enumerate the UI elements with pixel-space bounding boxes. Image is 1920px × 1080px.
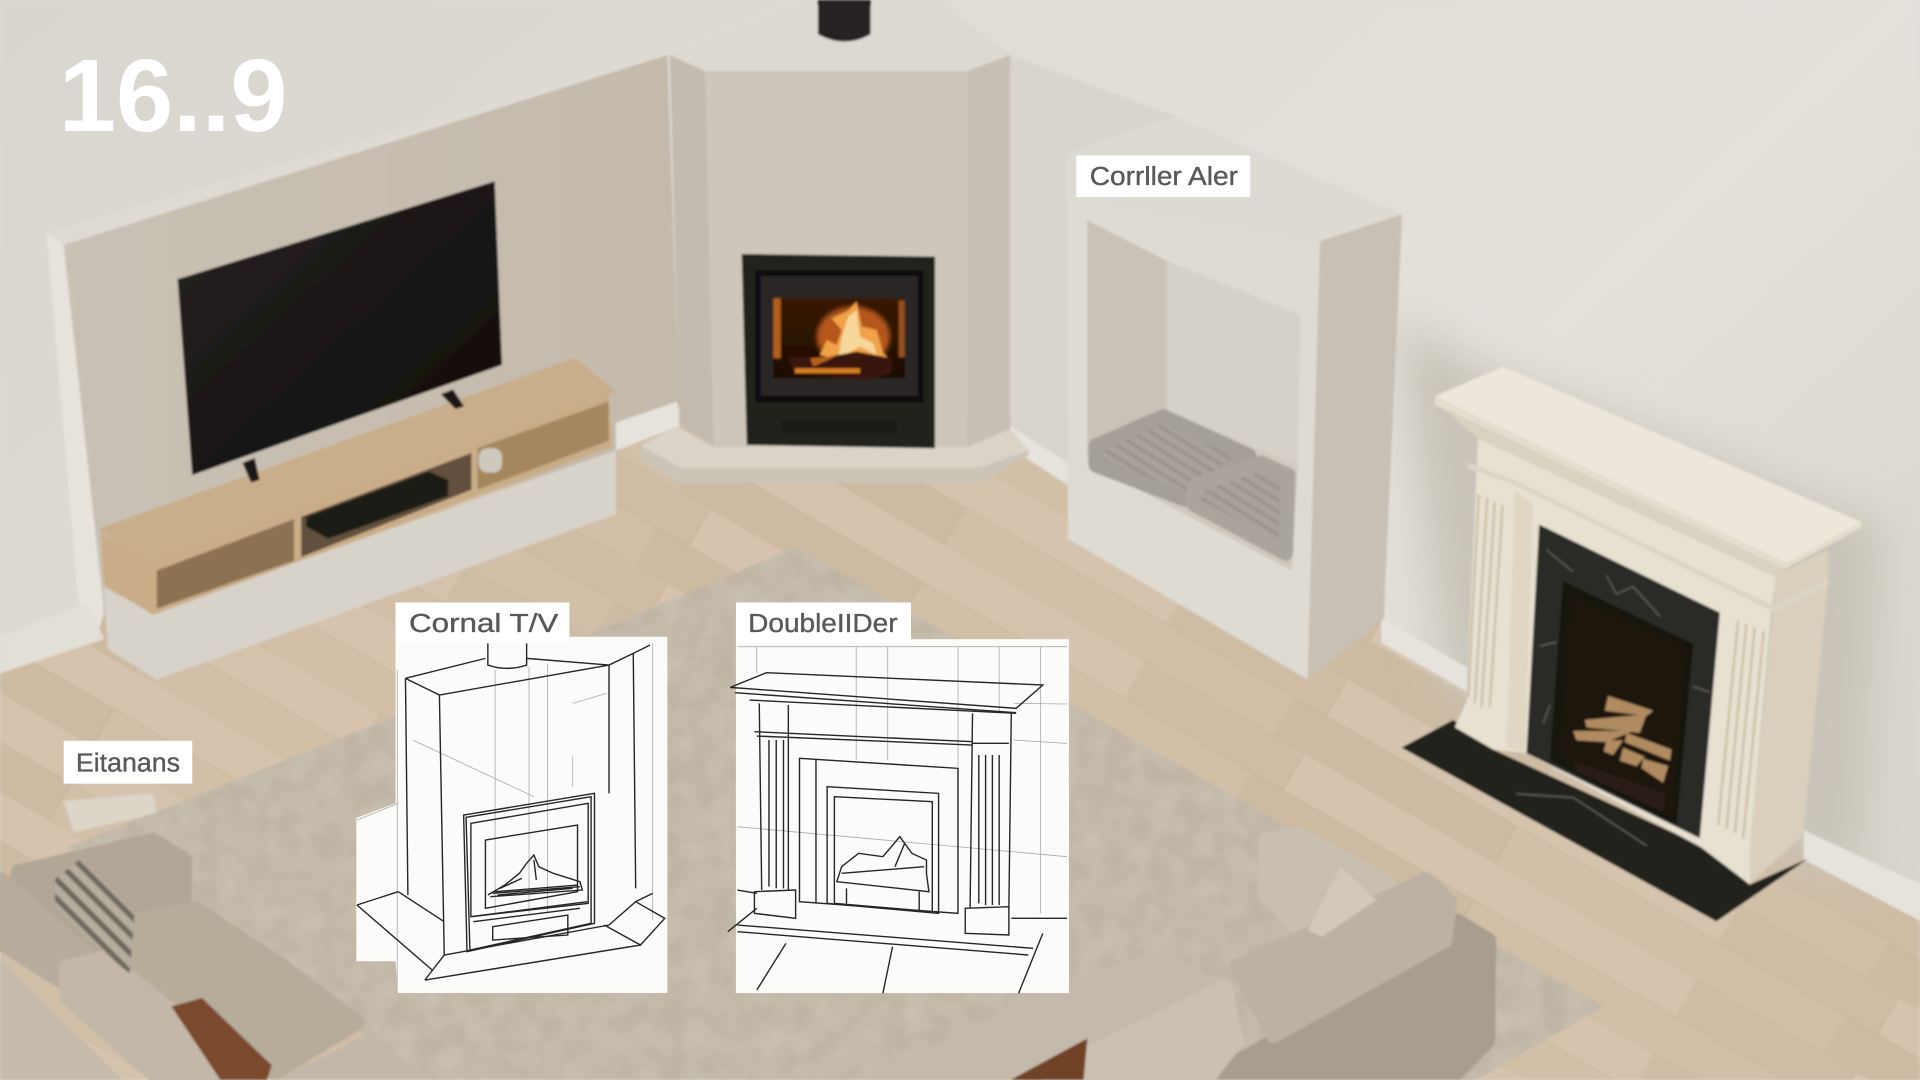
white wall trim — [47, 233, 104, 643]
insert body — [742, 254, 935, 448]
TV legs — [242, 389, 464, 482]
mantel shelf front edge — [1435, 396, 1861, 569]
mantel shelf underside — [1446, 411, 1785, 579]
label: rug area — [64, 741, 192, 784]
back skirting boards — [616, 402, 1920, 921]
flames — [820, 302, 888, 362]
black hearth — [1402, 720, 1808, 921]
right seat cushion — [1194, 463, 1288, 553]
left sofa front cushion — [66, 958, 251, 1080]
label: double — [736, 602, 911, 643]
sketch panel: corner fireplace — [356, 637, 667, 993]
sketch paper — [736, 639, 1069, 993]
shelf front — [100, 394, 612, 615]
niche left wall — [1087, 220, 1167, 459]
brown pillow — [171, 998, 272, 1080]
black marble surround — [1526, 525, 1720, 838]
alcove side — [1308, 214, 1402, 680]
chimney right side — [967, 55, 1010, 447]
mantel side — [1750, 550, 1828, 884]
niche sill — [1087, 410, 1298, 571]
wall between chimney and alcove — [1010, 55, 1176, 484]
beige accent wall — [64, 55, 680, 610]
label: double: DoubleIIDer — [748, 610, 898, 638]
chimney front — [705, 71, 967, 447]
shelf top — [98, 358, 616, 563]
lower vent — [782, 420, 897, 433]
beige pillow — [1308, 867, 1376, 937]
TV unit — [98, 358, 616, 680]
left sofa arm — [0, 879, 86, 980]
hearth plinth — [640, 426, 1029, 482]
sketch paper — [356, 637, 667, 993]
shadow behind mantel — [1396, 318, 1886, 882]
brown pillow small — [1010, 1038, 1087, 1080]
label: rug area: Eitanans — [76, 749, 180, 777]
inner return shading — [1506, 491, 1533, 751]
hearth front edge — [640, 446, 1029, 482]
flutes — [1468, 494, 1764, 838]
left sofa lower seat — [276, 1035, 435, 1080]
corner fireplace insert — [742, 254, 935, 448]
floor — [0, 416, 1920, 1080]
mantel shelf top — [1435, 367, 1861, 563]
right sofa front cushion — [1053, 987, 1237, 1080]
right sofa back wing — [1265, 835, 1390, 931]
chimney left side — [670, 55, 714, 447]
left sofa back — [6, 840, 185, 967]
chimney top — [670, 6, 1010, 71]
mantel front — [1455, 433, 1776, 884]
media box — [306, 471, 448, 539]
insert inner frame — [755, 271, 923, 402]
fire glow — [817, 307, 890, 367]
left sofa — [0, 840, 435, 1080]
left skirting — [0, 602, 104, 673]
striped pillow — [55, 860, 135, 973]
log stack — [1573, 696, 1671, 812]
firebox interior — [1560, 596, 1686, 816]
classic mantel fireplace — [1402, 367, 1861, 921]
title: 16..9 — [59, 38, 288, 153]
capital band — [1468, 463, 1828, 613]
TV screen — [178, 181, 502, 475]
left wall — [0, 0, 784, 643]
firebox frame — [1550, 581, 1693, 825]
marble veins — [1516, 550, 1710, 846]
right sofa — [860, 835, 1489, 1080]
label: alcove: Corrller Aler — [1090, 163, 1238, 191]
label: corner TV: Cornal T/V — [409, 610, 559, 638]
sketch drawing — [357, 643, 665, 987]
niche back wall — [1167, 261, 1300, 465]
compartment openings — [157, 519, 294, 609]
label: alcove — [1076, 156, 1250, 197]
label: corner TV — [396, 602, 569, 643]
right sofa back cushion — [1237, 879, 1450, 1036]
ornament — [479, 448, 502, 473]
left sofa front — [0, 958, 122, 1080]
TV unit base — [104, 451, 616, 680]
right wall — [943, 0, 1920, 900]
right sofa seat — [860, 949, 1237, 1080]
right sofa arm — [1218, 921, 1489, 1073]
rug — [67, 547, 1604, 1080]
television — [178, 181, 502, 482]
logs — [788, 352, 892, 380]
flue pipe — [818, 0, 871, 42]
alcove bench — [1068, 116, 1402, 680]
sketch panel: classic fireplace — [728, 639, 1069, 993]
left sofa seat — [129, 909, 358, 1073]
alcove front — [1068, 196, 1320, 680]
paper note on the floor — [64, 793, 157, 833]
left seat cushion — [1096, 416, 1249, 500]
sketch drawing — [728, 647, 1067, 993]
firebox glass — [773, 298, 905, 378]
chimney breast — [640, 0, 1029, 482]
alcove top — [1069, 116, 1402, 241]
log pieces — [1605, 696, 1653, 716]
